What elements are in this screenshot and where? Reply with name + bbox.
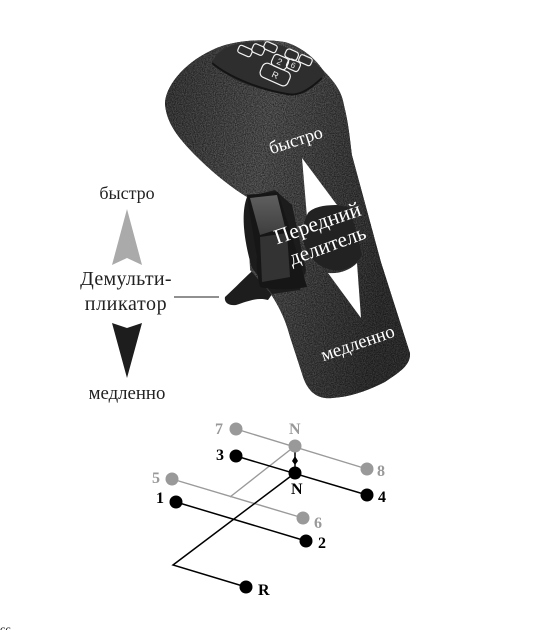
gear shift diagram xyxy=(152,421,386,599)
demultiplier thumb switch xyxy=(247,192,307,289)
knob lower lever xyxy=(225,266,275,305)
pad reverse and gear labels: 6 xyxy=(289,61,297,71)
white arrow down: slow xyxy=(328,263,361,318)
grey gear labels: 8 xyxy=(377,463,385,480)
pad reverse and gear labels xyxy=(270,56,297,81)
grey range lines xyxy=(172,429,367,518)
leader line to lever xyxy=(174,296,219,298)
label: быстро on knob: быстро xyxy=(266,122,325,158)
black gear labels: 2 xyxy=(318,535,326,552)
diamond between neutrals xyxy=(292,456,298,465)
label: медленно on knob: медленно xyxy=(318,321,398,366)
dark hub behind divider text xyxy=(303,205,362,270)
knob body xyxy=(165,40,410,398)
gear knob photo illustration xyxy=(165,40,410,398)
white arrow up: fast xyxy=(302,158,337,217)
arrow: black down xyxy=(112,323,142,378)
grey gear labels: N xyxy=(289,421,301,438)
heading: Демультипликатор xyxy=(80,268,172,315)
pad reverse and gear labels: R xyxy=(270,69,281,81)
black gear labels xyxy=(156,447,386,599)
black gear labels: R xyxy=(258,582,270,599)
black gear labels: 4 xyxy=(378,489,386,506)
heading: Демультипликатор: пликатор xyxy=(85,293,167,315)
grey gear labels: 6 xyxy=(314,515,322,532)
grey gear labels xyxy=(152,421,385,532)
pad reverse and gear labels: 2 xyxy=(275,56,284,67)
label: быстро: быстро xyxy=(99,183,155,203)
pad gear symbols xyxy=(237,41,313,87)
label: медленно: медленно xyxy=(89,383,165,404)
label: Передний on knob: Передний xyxy=(271,197,364,249)
panel: demultiplier legend xyxy=(80,183,219,404)
black range lines xyxy=(173,446,367,587)
grey gear labels: 7 xyxy=(215,421,223,438)
arrow: grey up xyxy=(112,209,142,265)
knob waist shadow xyxy=(244,190,306,294)
heading: Демультипликатор: Демульти- xyxy=(80,268,172,290)
black gear labels: N xyxy=(291,481,303,498)
top gear pattern pad xyxy=(212,41,324,95)
black gear labels: 3 xyxy=(216,447,224,464)
label: делитель on knob: делитель xyxy=(285,220,369,270)
grey dots xyxy=(166,422,374,524)
black gear labels: 1 xyxy=(156,490,164,507)
black dots xyxy=(170,450,374,594)
grey gear labels: 5 xyxy=(152,470,160,487)
